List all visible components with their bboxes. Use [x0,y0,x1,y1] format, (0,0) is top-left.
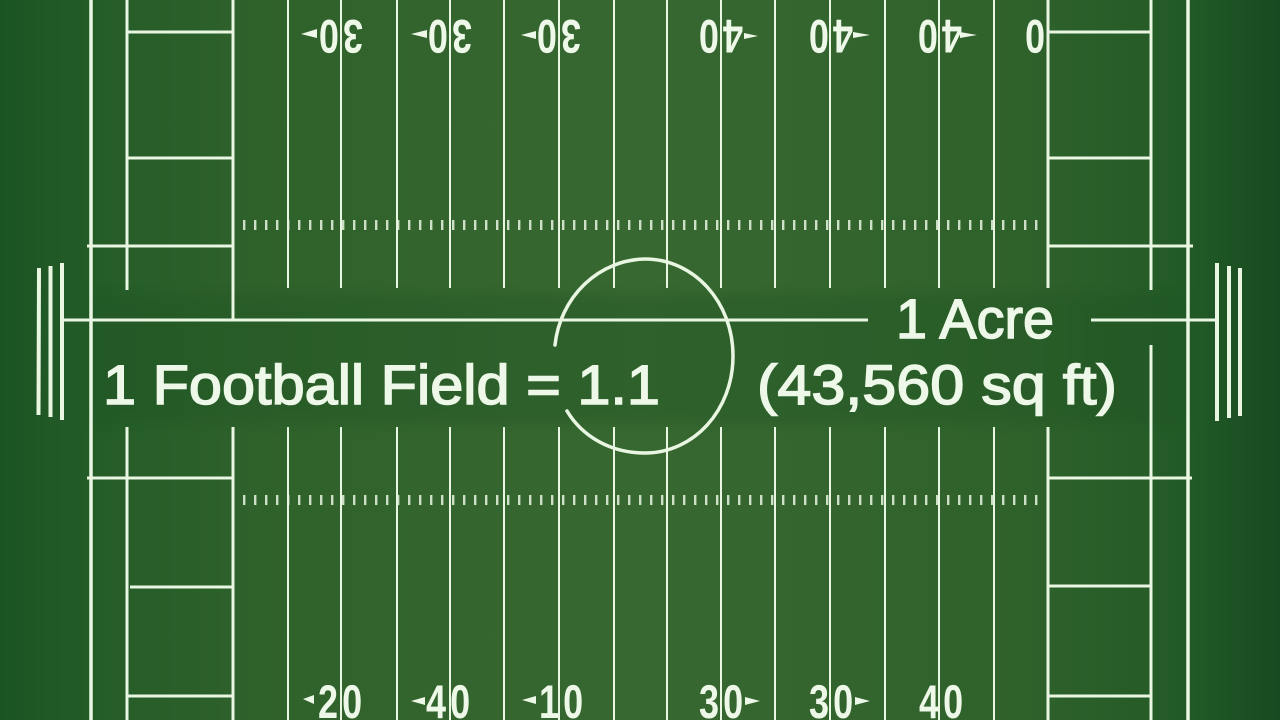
midfield line, right segment [1091,318,1216,322]
bottom yard numbers [303,675,967,720]
central darker band behind the label [91,294,1188,424]
yard lines, upper half [288,0,994,288]
left goal post bars [38,263,62,420]
end zone cross lines [87,32,1193,696]
yard lines, lower half [288,427,994,720]
number 40 top 4: 40 [695,10,743,63]
number 30 top 1: 30 [315,10,363,63]
right goal post bars [1217,263,1240,421]
hash marks upper [243,220,1040,230]
hash marks lower [243,495,1040,505]
label: 1 Acre: 1 Acre [896,287,1054,350]
number 0 top 7: 0 [1021,10,1045,63]
number 30 top 3: 30 [533,10,581,63]
label: 1 Football Field = 1.1: 1 Football Field = 1.1 [103,353,660,416]
top yard numbers, upside down [301,10,1045,63]
number 30 top 2: 30 [424,10,472,63]
number 40 top 5: 40 [805,10,853,63]
number 40 top 6: 40 [914,10,962,63]
midfield line, left segment [62,318,868,322]
label: (43,560 sq ft): (43,560 sq ft) [757,353,1117,416]
end zone verticals [127,0,1151,720]
center circle arc [555,259,733,453]
